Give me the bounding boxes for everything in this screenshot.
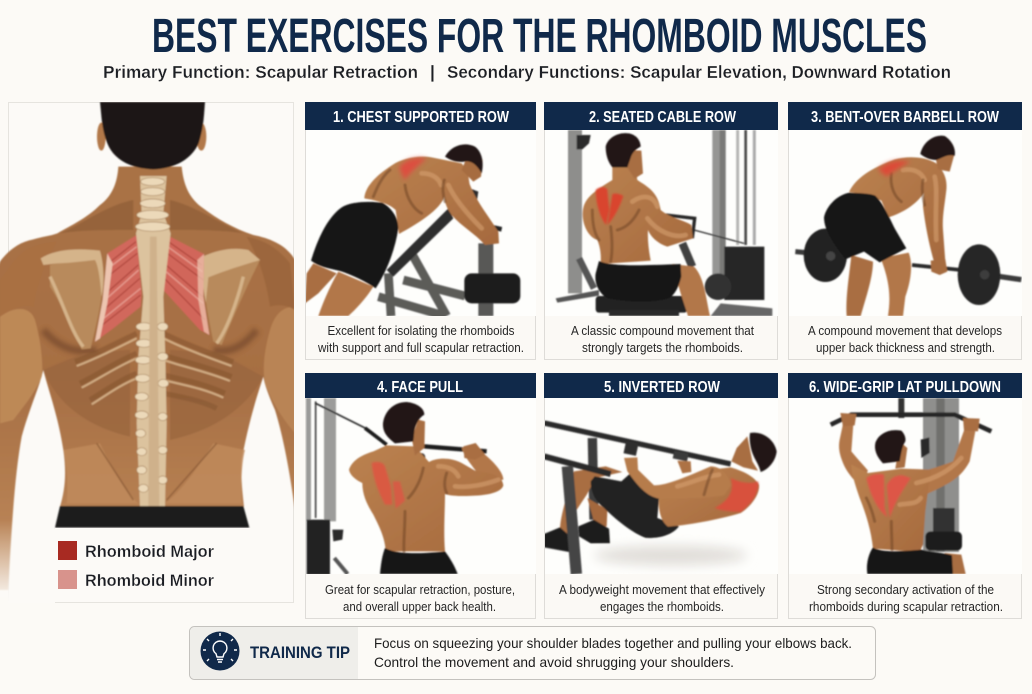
card 4 caption: Great for scapular retraction, posture, [325, 583, 515, 597]
card 3 caption: A compound movement that develops [808, 324, 1002, 338]
hands and head [463, 443, 485, 460]
tip text: Focus on squeezing your shoulder blades together and pulling your elbows back. [374, 635, 852, 651]
torso and arm [849, 157, 947, 262]
torso [851, 465, 931, 552]
shorts [380, 548, 458, 574]
ears and hair [97, 123, 106, 151]
card 6 illustration [831, 398, 991, 574]
rhomboid highlight [878, 161, 911, 177]
card 1 caption: with support and full scapular retraction. [317, 341, 524, 355]
ribs [75, 333, 233, 408]
card 6: wide-grip lat pulldown [788, 373, 1022, 618]
shadows around shoulder blades and lats [43, 330, 257, 351]
rhomboid muscles [100, 235, 142, 338]
card 1 header [305, 102, 536, 130]
shorts [867, 547, 953, 574]
card 2 caption [571, 324, 754, 355]
subtitle: muscle functions: | [430, 62, 435, 82]
bench frame [378, 253, 465, 316]
head [895, 441, 907, 469]
trapezius [60, 200, 133, 233]
shorts [311, 202, 398, 288]
card 5 caption [559, 583, 766, 614]
card 6 caption [809, 583, 1003, 614]
head [462, 160, 483, 182]
torso [583, 163, 693, 264]
hand [931, 259, 947, 275]
legend: rhomboid major: Rhomboid Major [85, 542, 214, 561]
card 5: inverted row [544, 373, 778, 618]
legs [846, 255, 873, 316]
rhomboid highlight [596, 187, 609, 225]
machine [324, 398, 336, 521]
torso [349, 445, 503, 551]
barbell [794, 248, 806, 256]
card 6 caption: rhomboids during scapular retraction. [809, 600, 1003, 614]
card 5 illustration [544, 423, 777, 574]
card 5 caption: engages the rhomboids. [600, 600, 724, 614]
arm [624, 457, 731, 499]
card 2 illustration [556, 130, 772, 316]
card 5 header: 5. INVERTED ROW [604, 379, 721, 396]
subtitle: muscle functions: Secondary Functions: Scapular Elevation, Downward Rotation [447, 62, 951, 82]
card 6 caption: Strong secondary activation of the [817, 583, 994, 597]
card 1 illustration [305, 144, 520, 316]
shorts [591, 473, 679, 538]
card 2 header [544, 102, 778, 130]
subtitle: muscle functions [103, 62, 951, 82]
tip text: Control the movement and avoid shrugging your shoulders. [374, 654, 734, 670]
card 5 header [544, 373, 778, 398]
card 3: bent-over barbell row [788, 102, 1022, 360]
card 4 caption: and overall upper back health. [343, 600, 496, 614]
card 4 header [305, 373, 536, 398]
subtitle: muscle functions: Primary Function: Scapular Retraction [103, 62, 418, 82]
legs [305, 263, 337, 303]
machine [923, 398, 959, 552]
card 3 illustration [795, 136, 1021, 316]
rhomboid highlight [866, 474, 887, 517]
card 6 header [788, 373, 1022, 398]
head [731, 436, 758, 471]
rhomboid highlight [715, 478, 758, 512]
illustration: back anatomy [0, 102, 295, 590]
card 4 illustration [306, 398, 503, 575]
spine [136, 176, 171, 508]
shorts [824, 193, 906, 262]
knee [945, 553, 966, 574]
leg [672, 264, 710, 316]
torso and arm [364, 157, 499, 245]
head [935, 153, 955, 172]
tip label: TRAINING TIP [250, 643, 350, 662]
forearm [462, 444, 503, 481]
machine [568, 130, 582, 293]
arms [839, 424, 868, 485]
card 2 caption: A classic compound movement that [571, 324, 754, 338]
torso [659, 467, 759, 527]
card 3 header [788, 102, 1022, 130]
waistband [55, 506, 249, 528]
card 2 caption: strongly targets the rhomboids. [582, 341, 743, 355]
lower legs and feet [560, 466, 622, 535]
legend: rhomboid minor: Rhomboid Minor [85, 571, 214, 590]
card 2 header: 2. SEATED CABLE ROW [589, 109, 737, 126]
scapula left [50, 253, 103, 349]
card 1 header: 1. CHEST SUPPORTED ROW [333, 109, 510, 126]
card 1: chest supported row [305, 102, 536, 360]
card 2: seated cable row [544, 102, 778, 360]
rhomboid highlight [399, 158, 427, 180]
card 1 caption: Excellent for isolating the rhomboids [328, 324, 514, 338]
card 4 header: 4. FACE PULL [377, 379, 463, 396]
panel: rhomboid anatomy [0, 102, 295, 605]
rhomboid highlight [372, 462, 392, 505]
scapula right [204, 254, 260, 345]
head [627, 150, 643, 179]
body silhouette [0, 167, 295, 590]
tip text [374, 635, 852, 670]
deltoid and arm volumes [0, 309, 42, 423]
card 3 caption: upper back thickness and strength. [816, 341, 995, 355]
shorts [595, 261, 681, 302]
icon: light bulb [200, 632, 240, 670]
card 5 caption: A bodyweight movement that effectively [559, 583, 766, 597]
card 4: face pull [305, 373, 536, 618]
cable and rope [315, 403, 368, 430]
training tip bar [190, 626, 876, 680]
card 1 caption [317, 324, 524, 355]
card 4 caption [325, 583, 515, 614]
card 3 caption [808, 324, 1002, 355]
bar supports [592, 438, 594, 520]
